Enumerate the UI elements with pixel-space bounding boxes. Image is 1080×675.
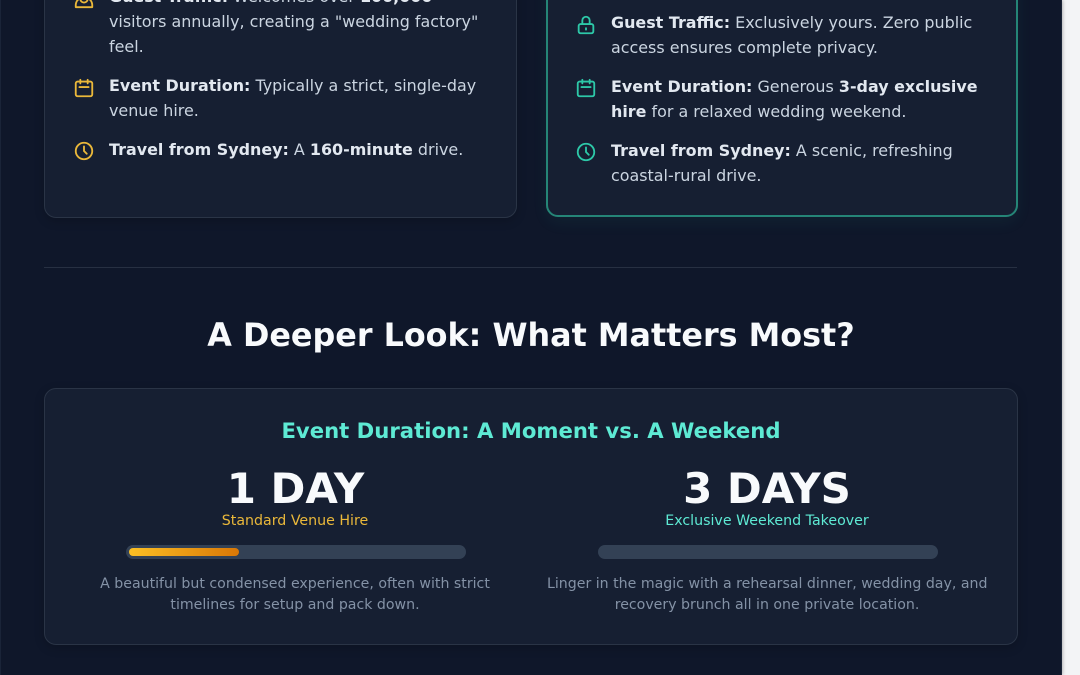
panel: event duration comparison [44, 388, 1018, 645]
icon: clock, amber [74, 142, 94, 160]
text: travel, exclusive venue: Travel from Sydney: A scenic, refreshing [611, 141, 953, 160]
icon: calendar, amber [74, 78, 94, 98]
bar fill: 1 day [129, 548, 239, 556]
text: guest traffic, public venue [109, 0, 478, 56]
text: event duration, exclusive venue: Event Duration: Generous 3-day exclusive [611, 77, 978, 96]
stat: 1 day: 1 DAY [227, 464, 364, 513]
description: 3 days: recovery brunch all in one private location. [615, 597, 919, 613]
text: event duration, exclusive venue [611, 77, 978, 121]
text: event duration, exclusive venue: hire for a relaxed wedding weekend. [611, 102, 906, 121]
text: travel, exclusive venue: coastal-rural drive. [611, 166, 762, 185]
description: 3 days [547, 576, 987, 613]
bar: 1 day [126, 545, 466, 559]
subheading: event duration: Event Duration: A Moment vs. A Weekend [281, 418, 781, 443]
text: travel, public venue: Travel from Sydney: A 160-minute drive. [109, 140, 463, 159]
icon: clock, teal [576, 142, 596, 162]
description: 1 day: timelines for setup and pack down. [170, 597, 420, 613]
description: 3 days: Linger in the magic with a rehearsal dinner, wedding day, and [547, 576, 987, 592]
text: event duration, public venue: venue hire. [109, 101, 199, 120]
text: guest traffic, exclusive venue: Guest Traffic: Exclusively yours. Zero public [611, 13, 972, 32]
text: guest traffic, exclusive venue [611, 13, 972, 57]
icon: lock, teal [578, 16, 594, 34]
icon: calendar, teal [576, 78, 596, 98]
text: guest traffic, public venue: feel. [109, 37, 144, 56]
panel: exclusive venue card [546, 0, 1018, 217]
heading: deeper look: A Deeper Look: What Matters Most? [207, 317, 855, 354]
text: guest traffic, public venue: visitors annually, creating a "wedding factory" [109, 12, 478, 31]
text: guest traffic, exclusive venue: access ensures complete privacy. [611, 38, 878, 57]
label: exclusive weekend takeover: Exclusive Weekend Takeover [665, 513, 869, 529]
text: event duration, public venue [109, 76, 476, 120]
bar: 3 days [598, 545, 938, 559]
description: 1 day: A beautiful but condensed experience, often with strict [100, 576, 490, 592]
text: travel, exclusive venue [611, 141, 953, 185]
icon: guest traffic, amber [74, 0, 94, 8]
description: 1 day [100, 576, 490, 613]
stat: 3 days: 3 DAYS [683, 464, 851, 513]
panel: public venue card [44, 0, 517, 218]
label: standard venue hire: Standard Venue Hire [222, 513, 368, 529]
text: event duration, public venue: Event Duration: Typically a strict, single-day [109, 76, 476, 95]
